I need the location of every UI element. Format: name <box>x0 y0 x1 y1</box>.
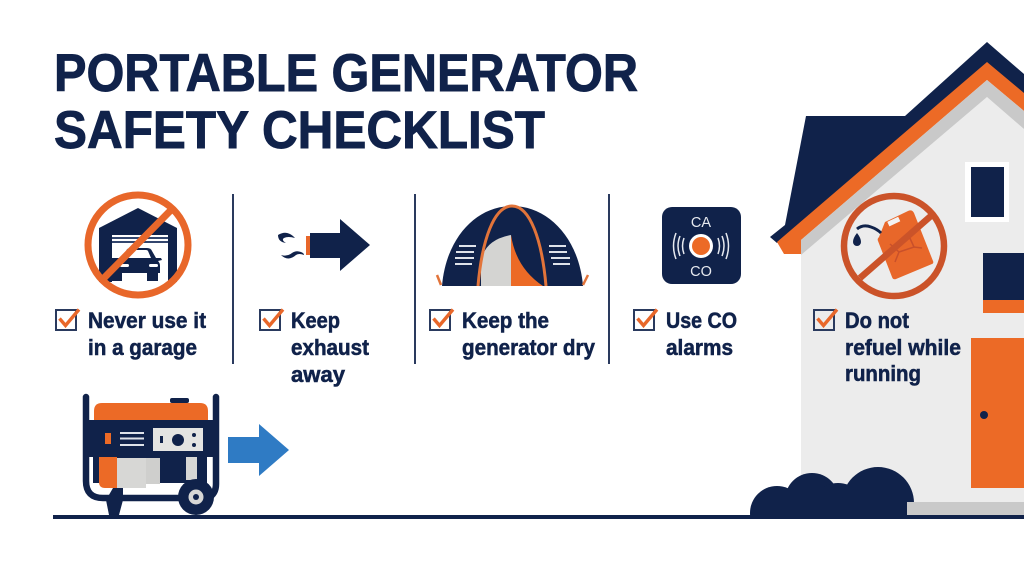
roof grey underside <box>801 80 1024 255</box>
ground line <box>53 515 1024 519</box>
check item: keep exhaust away: Keep <box>291 308 340 333</box>
arrow: blue exhaust direction <box>228 424 289 476</box>
check item: do not refuel while running: refuel while <box>845 335 961 360</box>
check item: do not refuel while running <box>814 308 961 386</box>
infographic canvas <box>53 42 1024 519</box>
title: SAFETY CHECKLIST <box>54 101 545 160</box>
icon: tent <box>437 206 588 286</box>
icon: exhaust arrow <box>278 219 370 271</box>
check item: keep exhaust away <box>260 308 369 387</box>
title: PORTABLE GENERATOR <box>54 44 638 103</box>
door <box>971 338 1024 488</box>
icon: no garage <box>88 195 188 295</box>
check item: use CO alarms: alarms <box>666 335 733 360</box>
check item: keep exhaust away: exhaust <box>291 335 369 360</box>
check item: keep the generator dry: Keep the <box>462 308 549 333</box>
check item: keep the generator dry: generator dry <box>462 335 595 360</box>
lower window <box>983 253 1024 313</box>
generator foot <box>106 488 123 515</box>
icon: no refuelling <box>844 196 944 296</box>
frame <box>86 397 196 498</box>
house wall <box>801 97 1024 515</box>
generator <box>86 397 216 515</box>
check item: never use in a garage: Never use it <box>88 308 206 333</box>
title <box>54 44 638 160</box>
check item: never use in a garage <box>56 308 206 360</box>
divider 2 <box>414 194 416 364</box>
icon: CO alarm: CO <box>690 264 712 280</box>
house <box>770 0 1024 515</box>
divider 3 <box>608 194 610 364</box>
check item: keep exhaust away: away <box>291 362 345 387</box>
main roof <box>770 42 1024 243</box>
wheel <box>178 479 214 515</box>
engine block <box>99 457 117 488</box>
check item: keep the generator dry <box>430 308 595 360</box>
icon: CO alarm <box>662 207 741 284</box>
roof orange trim <box>777 62 1024 254</box>
fuel tank <box>94 403 208 420</box>
bushes <box>750 467 914 515</box>
check item: do not refuel while running: Do not <box>845 308 909 333</box>
check item: use CO alarms <box>634 308 737 360</box>
check item: use CO alarms: Use CO <box>666 308 737 333</box>
divider 1 <box>232 194 234 364</box>
upper window <box>965 162 1009 222</box>
check item: do not refuel while running: running <box>845 361 921 386</box>
control panel <box>89 420 213 457</box>
icon: CO alarm: CA <box>691 215 711 231</box>
check item: never use in a garage: in a garage <box>88 335 197 360</box>
house foundation <box>907 502 1024 515</box>
